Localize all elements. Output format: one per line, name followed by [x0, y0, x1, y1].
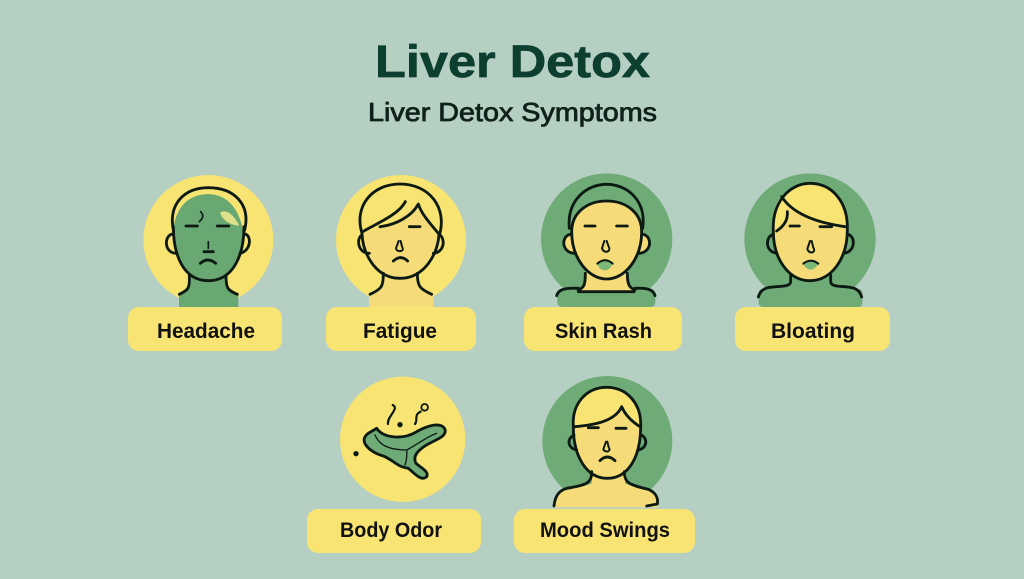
label: Bloating	[735, 307, 890, 351]
label: Headache	[128, 307, 282, 351]
label: Headache: Headache	[157, 320, 255, 343]
label: Mood Swings	[514, 509, 695, 553]
label: Skin Rash: Skin Rash	[555, 320, 652, 343]
label: Fatigue	[326, 307, 476, 351]
label: Body Odor	[307, 509, 481, 553]
icon: bloating	[744, 173, 876, 307]
icon: fatigue	[336, 175, 466, 307]
label: Mood Swings: Mood Swings	[540, 519, 670, 542]
label: Fatigue: Fatigue	[363, 320, 437, 343]
label: Bloating: Bloating	[771, 320, 855, 343]
icon: body odor	[340, 377, 465, 502]
title: Liver Detox	[375, 36, 650, 87]
icon: mood swings	[542, 376, 672, 507]
icon: headache	[143, 175, 273, 307]
icon: skin rash	[541, 173, 672, 307]
label: Body Odor: Body Odor	[340, 519, 442, 542]
subtitle: Liver Detox Symptoms	[368, 97, 657, 127]
label: Skin Rash	[524, 307, 682, 351]
